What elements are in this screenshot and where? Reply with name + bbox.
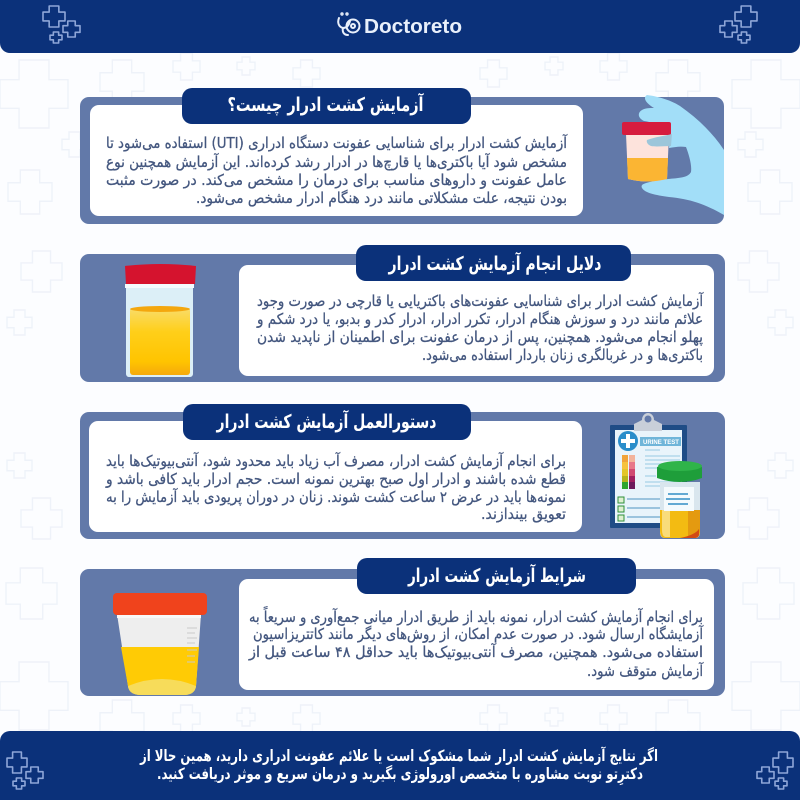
body text: عامل عفونت و داروهای مناسب برای درمان را مشخص می‌کند. در صورت مثبت bbox=[106, 171, 567, 189]
body text: باکتری‌ها و در غربالگری زنان باردار استفاده می‌شود. bbox=[422, 346, 703, 364]
illustration: gloved hand holding cup bbox=[622, 95, 724, 215]
icon: footer crosses left bbox=[7, 752, 43, 789]
body text: مشخص شود آیا باکتری‌ها یا قارچ‌ها در ادرار رشد کرده‌اند. این آزمایش همچنین نوع bbox=[106, 153, 567, 172]
illustration: urine cup red lid bbox=[125, 264, 196, 377]
body text: علائم مانند درد و سوزش هنگام ادرار، تکرر ادرار، ادرار کدر و بدبو، یا درد شکم و bbox=[256, 310, 703, 328]
body text: پهلو انجام می‌شود. همچنین، پس از درمان عفونت برای اطمینان از ناپدید شدن bbox=[257, 328, 703, 347]
heading pill: آزمایش کشت ادرار چیست؟ bbox=[228, 92, 424, 116]
footer call to action text: دکترِتو نوبت مشاوره با متخصص اورولوژی بگیرید و درمان سریع و موثر دریافت کنید. bbox=[157, 764, 643, 786]
footer call to action text bbox=[139, 746, 658, 786]
body text: تعویق بیندازند. bbox=[481, 505, 566, 523]
text card bbox=[239, 579, 714, 690]
heading pill bbox=[182, 88, 471, 124]
heading pill bbox=[356, 245, 631, 281]
body text: برای انجام آزمایش کشت ادرار، مصرف آب زیاد باید محدود شود، آنتی‌بیوتیک‌ها باید bbox=[106, 452, 566, 470]
text card bbox=[89, 421, 582, 532]
body text: استفاده می‌شود. همچنین، مصرف آنتی‌بیوتیک‌ها باید حداقل ۴۸ ساعت قبل از bbox=[248, 643, 703, 661]
icon: header crosses right bbox=[720, 6, 757, 43]
heading pill bbox=[183, 404, 471, 440]
body text bbox=[106, 134, 568, 207]
body text bbox=[105, 452, 566, 523]
body text: بودن نتیجه، علت مشکلاتی مانند درد هنگام ادرار مشخص می‌شود. bbox=[196, 189, 567, 207]
heading pill: دلایل انجام آزمایش کشت ادرار bbox=[388, 251, 602, 275]
text card bbox=[239, 265, 714, 376]
illustration: urine cup orange lid bbox=[113, 593, 207, 695]
heading pill: شرایط آزمایش کشت ادرار bbox=[407, 563, 586, 587]
heading pill: دستورالعمل آزمایش کشت ادرار bbox=[216, 409, 437, 433]
body text: آزمایش متوقف شود. bbox=[587, 662, 704, 680]
panel: test instructions bbox=[80, 404, 725, 539]
body text: آزمایش کشت ادرار برای شناسایی عفونت دستگاه ادراری (UTI) استفاده می‌شود تا bbox=[106, 134, 568, 152]
icon: header crosses left bbox=[43, 6, 80, 43]
icon: footer crosses right bbox=[757, 752, 793, 789]
panel: what is urine culture bbox=[80, 88, 724, 224]
body text: نمونه‌ها باید در عرض ۲ ساعت کشت شوند. زنان در دوران پریودی باید آزمایش را به bbox=[106, 488, 566, 507]
footer bar bbox=[0, 731, 800, 800]
body text: آزمایشگاه ارسال شود. در صورت عدم امکان، از روش‌های دیگر مانند کاتتریزاسیون bbox=[253, 625, 704, 643]
logo wordmark: Doctoreto bbox=[364, 15, 462, 38]
body text bbox=[256, 292, 704, 364]
heading pill bbox=[357, 558, 636, 594]
body text: برای انجام آزمایش کشت ادرار، نمونه باید از طریق ادرار میانی جمع‌آوری و سریعاً به bbox=[249, 606, 703, 626]
body text: قطع شده باشند و ادرار اول صبح بهترین نمونه است. حجم ادرار باید کافی باشد و bbox=[105, 470, 566, 488]
panel: test conditions bbox=[80, 558, 725, 696]
icon: stethoscope logo bbox=[338, 13, 360, 35]
illustration: clipboard and sample bottle bbox=[610, 413, 702, 538]
body text: آزمایش کشت ادرار برای شناسایی عفونت‌های باکتریایی یا قارچی در صورت وجود bbox=[257, 292, 704, 310]
illustration: clipboard and sample bottle: URINE TEST bbox=[643, 439, 679, 446]
text card bbox=[90, 105, 583, 216]
body text bbox=[248, 606, 704, 680]
header bar bbox=[0, 0, 800, 53]
panel: reasons for the test bbox=[80, 245, 725, 382]
